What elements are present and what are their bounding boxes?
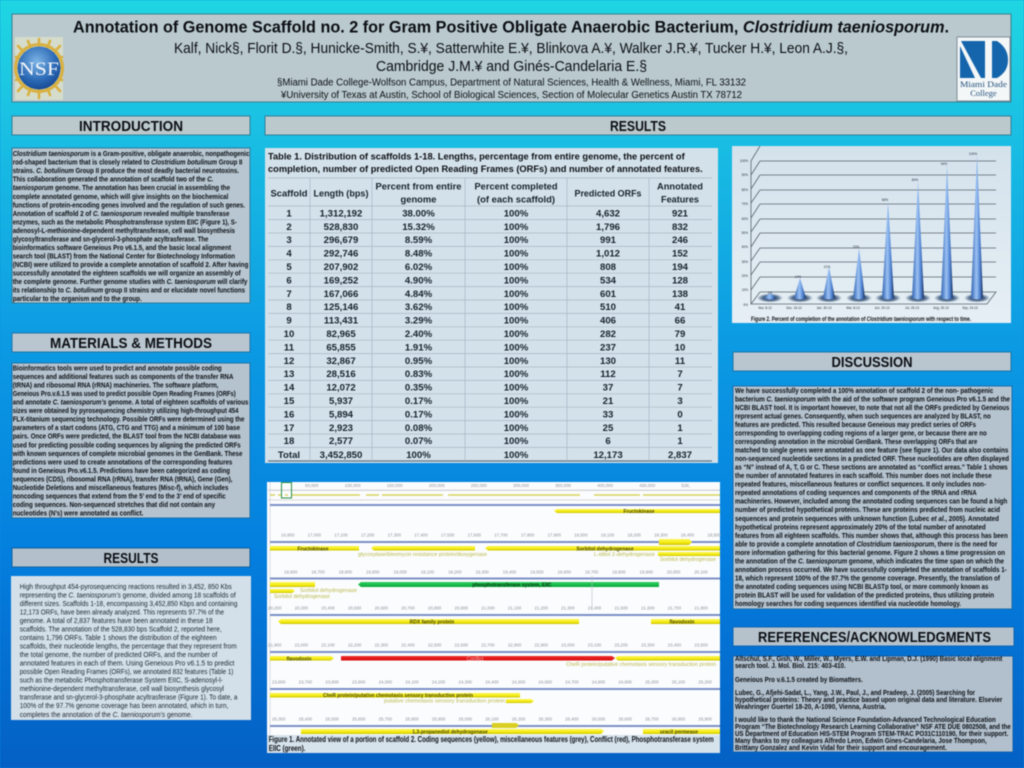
track 2: glycosylase/bleomycin resistance protein/dioxygenase	[358, 552, 487, 558]
track 4	[268, 606, 720, 626]
chart category labels: Mar. 8-13	[846, 306, 860, 310]
track 4: 20,200 20,300 20,400 20,500 20,600 20,700 20,800 20,900 21,000 21,100 21,200 21,300 21,400 21,500 21,600 21,700 21,800	[268, 606, 708, 610]
heading: materials and methods: MATERIALS & METHODS	[50, 336, 212, 352]
panel: materials and methods text: nucleotides (N’s) were annotated as conflict.	[13, 508, 143, 518]
table rows: 38.00%	[402, 208, 435, 219]
chart axis labels	[740, 159, 748, 307]
table rows: 13	[284, 369, 294, 380]
panel: references text: search tool. J. Mol. Biol. 215: 403-410.	[735, 661, 846, 670]
table rows: 601	[600, 289, 617, 300]
cone value labels: 84%	[912, 178, 918, 182]
table rows: 100%	[504, 409, 529, 420]
chart category labels: Jan. 30-13	[816, 306, 832, 310]
chart axis labels: 20%	[742, 274, 748, 278]
table rows: 100%	[406, 450, 431, 461]
cone value labels	[768, 152, 977, 295]
table rows: 2,837	[668, 450, 692, 461]
table rows: 169,252	[324, 275, 358, 286]
table rows: 100%	[504, 383, 529, 394]
table rows: 282	[600, 329, 616, 340]
panel: materials and methods text: Geneious Pro.v.6.1.5 was used to predict possible Open Reading Frames (ORFs)	[13, 389, 236, 398]
table rows: 8.59%	[405, 235, 433, 246]
panel: materials and methods text	[12, 363, 250, 518]
figure 1 caption: EIIC (green).	[269, 744, 305, 753]
table caption: Table 1. Distribution of scaffolds 1-18. Lengths, percentage from entire genome, the percent of	[268, 152, 685, 162]
table rows: 100%	[504, 208, 529, 219]
panel: introduction text: search tool (BLAST) from the National Center for Biotechnology Information	[13, 252, 235, 260]
table rows: 15.32%	[402, 222, 435, 233]
panel: introduction text: bioinformatics software Geneious Pro v6.1.5, and the basic local alignment	[13, 243, 231, 252]
panel: introduction text: adenosyl-L-methionine-dependent methyltransferase, cell wall biosynthesis	[13, 226, 235, 235]
table rows: 33	[603, 409, 613, 420]
panel: results text	[11, 576, 251, 720]
icon: Miami Dade College logo	[957, 37, 1010, 101]
panel: materials and methods text: used for predicting possible coding sequences by aligning the predicted ORFs	[13, 440, 241, 449]
track 2: Fructokinase	[297, 546, 329, 552]
track 7: uracil permease	[660, 730, 698, 736]
table rows: 292,746	[324, 249, 358, 260]
table rows: 4.84%	[405, 289, 433, 300]
heading: materials and methods	[12, 333, 250, 352]
table header	[270, 182, 703, 206]
track 2	[270, 532, 721, 563]
table rows: 100%	[504, 356, 529, 367]
icon: Miami Dade College logo: Miami Dade	[960, 79, 1007, 89]
table rows: 167,066	[324, 289, 358, 300]
table rows: 25	[603, 423, 614, 434]
table rows: 10	[675, 342, 685, 353]
panel: results text: transferase and sn-glycerol-3-phosphate acyltrasferase (Figure 1). To date, a	[20, 693, 238, 702]
chart axis labels: 100%	[740, 159, 748, 163]
heading: results center: RESULTS	[610, 119, 666, 135]
panel: results text: contains 1,796 ORFs. Table 1 shows the distribution of the eighteen	[20, 633, 217, 642]
table rows: 7	[677, 369, 683, 380]
table rows: 65,855	[326, 342, 356, 353]
panel: materials and methods text: and annotate C. taeniosporum’s genome. A total of eighteen scaffolds of various	[13, 398, 248, 407]
table rows: 100%	[504, 316, 529, 327]
table rows: 7	[677, 383, 683, 394]
table rows: 2	[286, 222, 292, 233]
table rows: 8.48%	[405, 249, 433, 260]
panel: results text: 100% of the 97.7% genome coverage has been annotated, which in turn,	[20, 701, 228, 710]
table rows: 14	[284, 383, 295, 394]
heading: introduction	[12, 116, 250, 135]
figure 1 caption: Figure 1. Annotated view of a portion of scaffold 2. Coding sequences (yellow), miscellaneous features (grey), Conflict (red), Phosphotransferase system	[269, 735, 714, 744]
track 7: 25,300 25,400 25,500 25,600 25,700 25,800 25,900 26,000 26,100 26,200 26,300 26,400 26,500 26,600 26,700 26,800 26,900	[272, 716, 712, 722]
table rows: 194	[672, 262, 689, 273]
panel: discussion text: able to provide a complete annotation of Clostridium taeniosporum, there is the need for	[735, 539, 997, 548]
panel: materials and methods text: sequences (CDS), ribosomal RNA (rRNA), transfer RNA (tRNA), Gene (Gen),	[13, 474, 232, 483]
header banner	[12, 14, 1011, 102]
cone bars	[757, 155, 990, 302]
panel: materials and methods text: (tRNA) and ribosomal RNA (rRNA) machineries. The software platform,	[13, 381, 218, 390]
table rows: 32,867	[326, 356, 356, 367]
table rows: 6.02%	[405, 262, 433, 273]
panel: materials and methods text: with known sequences of complete microbial genomes in the GenBank. These	[12, 449, 243, 458]
track 2: Sorbitol dehydrogenase	[576, 546, 634, 552]
panel: materials and methods text: coding sequences. Non-sequenced stretches that did not contain any	[13, 500, 216, 509]
table rows: 18	[284, 436, 295, 447]
panel: results text: completes the annotation of the C. taeniosporum’s genome.	[20, 710, 192, 719]
table rows: 2,923	[329, 423, 353, 434]
table caption	[268, 152, 703, 175]
chart axis labels: 30%	[742, 260, 748, 264]
panel: references text	[733, 654, 1013, 752]
chart axis labels: 0%	[743, 303, 748, 307]
affiliations: ¥University of Texas at Austin, School of Biological Sciences, Section of Molecular Genetics Austin TX 78712	[280, 90, 742, 101]
table rows: 0.08%	[405, 423, 433, 434]
panel: introduction text: functions of protein-encoding genes involved and the regulation of such genes.	[13, 200, 245, 209]
panel: references text: Weahringer Guertel 18-20, A-1090, Vienna, Austria.	[735, 702, 886, 711]
track 2: L-iditol 2-dehydrogenase	[594, 552, 655, 558]
cone value labels: 100%	[969, 152, 977, 156]
table rows: 66	[675, 316, 685, 327]
track 1	[270, 504, 720, 515]
affiliations: §Miami Dade College-Wolfson Campus, Department of Natural Sciences, Health & Wellness, Miami, FL 33132	[277, 78, 746, 88]
panel: materials and methods text: sequences and additional features such as components of the transfer RNA	[13, 372, 234, 381]
table rows: Total	[278, 450, 300, 461]
panel: materials and methods text: pairs. Once ORFs were predicted, the BLAST tool from the NCBI database was	[13, 432, 241, 441]
table rows: 128	[672, 275, 689, 286]
authors: Kalf, Nick§, Florit D.§, Hunicke-Smith, S.¥, Satterwhite E.¥, Blinkova A.¥, Walker J.R.¥, Tucker H.¥, Leon A.J.§,	[174, 41, 848, 57]
chart category labels: Sep. 24-13	[962, 306, 978, 310]
track 7: 1,3-propanediol dehydrogenase	[412, 730, 488, 736]
heading: introduction: INTRODUCTION	[79, 119, 183, 135]
chart axis labels: 10%	[742, 288, 748, 292]
table rows: 6	[286, 275, 292, 286]
title: Annotation of Genome Scaffold no. 2 for Gram Positive Obligate Anaerobic Bacterium, Clostridium taeniosporum.	[73, 18, 949, 36]
table rows	[278, 208, 692, 461]
table rows: 41	[675, 302, 686, 313]
table rows: 138	[672, 289, 689, 300]
table rows: 1	[677, 423, 683, 434]
table rows: 100%	[504, 436, 529, 447]
cone value labels: 14%	[795, 275, 801, 279]
table rows: 528,830	[324, 222, 358, 233]
track 3: Sorbitol dehydrogenase	[274, 594, 330, 600]
track 5: Conflict	[467, 656, 484, 662]
panel: results text: High throughput 454-pyrosequencing reactions resulted in 3,452, 850 Kbs	[20, 582, 232, 591]
panel: introduction text: Clostridium taeniosporum is a Gram-positive, obligate anaerobic, nonpathogenic	[13, 149, 250, 158]
table rows: 0.35%	[405, 383, 433, 394]
table caption: completion, number of predicted Open Reading Frames (ORFs) and number of annotated features.	[268, 164, 703, 175]
panel: introduction text: its relationship to C. botulinum group II strains and or elucidate novel functions	[13, 286, 245, 295]
table rows: 207,902	[324, 262, 358, 273]
track 1: Fructokinase	[623, 509, 655, 515]
panel: materials and methods text: FLX-titanium sequencing technology. Possible ORFs were determined using the	[13, 415, 245, 424]
table rows: 12	[284, 356, 294, 367]
panel: materials and methods text: parameters of a start codons (ATG, CTG and TTG) and a minimum of 100 base	[13, 423, 241, 432]
panel: introduction text: complete annotated genome, which will give insights on the biochemical	[13, 192, 228, 201]
track 4: flavodoxin	[669, 620, 695, 626]
chart axis labels: 40%	[742, 245, 748, 249]
chart category labels: Dec. 16-12	[786, 306, 802, 310]
table rows: 0.83%	[405, 369, 433, 380]
cone value labels: 68%	[882, 198, 888, 202]
table rows: 21	[603, 396, 614, 407]
table rows: 112	[600, 369, 616, 380]
table rows: 15	[284, 396, 295, 407]
panel: figure 1 annotated scaffold view	[267, 482, 721, 753]
table rows: 79	[675, 329, 685, 340]
track 3: phosphotransferase system, EIIC	[472, 583, 552, 589]
table rows: 2,577	[329, 436, 353, 447]
table rows: 28,516	[326, 369, 356, 380]
table rows: 5	[286, 262, 292, 273]
chart category labels	[758, 306, 978, 310]
table rows: 0.17%	[405, 396, 433, 407]
track 6: 23,600 23,700 23,800 23,900 24,000 24,100 24,200 24,300 24,400 24,500 24,600 24,700 24,800 24,900 25,000 25,100 25,200	[272, 680, 712, 684]
chart category labels: Jul. 25-13	[905, 306, 919, 310]
table rows: 16	[284, 409, 294, 420]
table rows: 4.90%	[405, 275, 433, 286]
table rows: 0.95%	[405, 356, 433, 367]
table rows: 6	[605, 436, 611, 447]
panel: results text: the total genome, the number of predicted ORFs, and the number of	[20, 650, 218, 659]
overview track: 50,000 100,000 150,000 200,000 250,000 300,000 350,000 400,000 450,000 528,	[305, 483, 690, 488]
panel: materials and methods text: sizes were obtained by pyrosequencing chemistry utilizing high-throughput 454	[13, 406, 239, 415]
table grid	[268, 178, 712, 461]
panel: results text: 12,173 ORFs, have been already analyzed. This represents 97.7% of the	[20, 607, 224, 616]
chart category labels: Nov. 8-12	[758, 306, 772, 310]
table rows: 1	[677, 436, 683, 447]
track 7	[270, 716, 720, 736]
authors	[174, 41, 848, 75]
panel: figure 2 completion chart	[732, 146, 1011, 323]
table rows: 100%	[504, 396, 529, 407]
panel: materials and methods text: Nucleotide Deletions and miscellaneous features (Misc-f), which includes	[13, 483, 228, 492]
table rows: 3.62%	[405, 302, 433, 313]
panel: introduction text: successfully annotated the eighteen scaffolds we will organize an assembly of	[13, 268, 241, 278]
table rows: 4	[286, 249, 292, 260]
table rows: 296,679	[324, 235, 358, 246]
cone value labels: 94%	[941, 162, 947, 166]
track 3	[270, 570, 720, 609]
table rows: 0	[677, 409, 683, 420]
panel: results text: representing the C. taeniosporum’s genome, divided among 18 scaffolds of	[20, 590, 236, 599]
table rows: 125,146	[324, 302, 358, 313]
table header: Features	[661, 194, 699, 206]
table rows: 237	[600, 342, 616, 353]
table rows: 246	[672, 235, 688, 246]
table rows: 0.17%	[405, 409, 433, 420]
table rows: 921	[672, 208, 689, 219]
panel: references text: Brittany Gonzalez and Kevin Vidal for their support and encouragement.	[735, 743, 947, 752]
table rows: 5,937	[329, 396, 353, 407]
table rows: 8	[286, 302, 292, 313]
panel: introduction text: particular to the organism and to the group.	[13, 294, 142, 303]
table rows: 100%	[504, 289, 529, 300]
track 6: CheR protein/putative chemotaxis sensory transduction protein	[323, 693, 473, 699]
heading: results left	[12, 548, 250, 567]
table rows: 2.40%	[405, 329, 433, 340]
panel: results text: annotated features in each of them. Using Geneious Pro v6.1.5 to predict	[20, 659, 235, 668]
table rows: 12,173	[593, 450, 623, 461]
icon: NSF logo: NSF	[19, 59, 59, 80]
table rows: 100%	[504, 222, 529, 233]
panel: introduction text: enzymes, such as the metabolic Phosphotransferase system EIIC (Figure 1), S-	[13, 217, 237, 226]
track 6: putative chemotaxis sensory transduction protein	[384, 698, 505, 704]
panel: discussion text: homology searches for coding sequences identified via nucleotide homology.	[735, 599, 961, 608]
panel: references text: Geneious Pro v.6.1.5 created by Biomatters.	[735, 675, 863, 684]
table rows: 100%	[504, 275, 529, 286]
panel: results text: scaffolds. The annotation of the 528,830 bps Scaffold 2, reported here,	[20, 624, 222, 634]
panel: materials and methods text: found in Geneious Pro.v6.1.5. Predictions have been categorized as coding	[13, 466, 230, 475]
table rows: 17	[284, 423, 294, 434]
panel: results text: different sizes. Scaffolds 1-18, encompassing 3,452,850 Kbps and containing	[20, 599, 237, 608]
chart axis labels: 80%	[742, 188, 748, 192]
cone value labels: 21%	[824, 265, 830, 269]
table rows: 1	[286, 208, 292, 219]
table rows: 3.29%	[405, 316, 433, 327]
table rows: 11	[284, 342, 295, 353]
table rows: 100%	[504, 369, 529, 380]
chart axis labels: 60%	[742, 217, 748, 221]
table rows: 100%	[504, 235, 529, 246]
heading: references and acknowledgments: REFERENCES/ACKNOWLEDGMENTS	[758, 629, 991, 646]
table rows: 100%	[504, 450, 529, 461]
track 4: RDX family protein	[410, 620, 454, 626]
panel: introduction text	[12, 148, 250, 303]
panel: introduction text: taeniosporum genome. The annotation has been crucial in assembling the	[13, 183, 231, 192]
table rows: 100%	[504, 423, 529, 434]
table rows: 1,796	[596, 222, 620, 233]
table rows: 113,431	[324, 316, 359, 327]
panel: results text: methionine-dependent methyltransferase, cell wall biosynthesis glycosyl	[20, 684, 224, 693]
panel: results text: possible Open Reading Frames (ORFs), we annotated 832 features (Table 1)	[20, 667, 234, 676]
table header: Length (bps)	[314, 188, 368, 200]
heading: discussion	[733, 352, 1011, 371]
chart axis labels: 90%	[742, 173, 748, 177]
panel: introduction text: the complete genome. Further genome studies with C. taeniosporum will clarify	[13, 277, 248, 286]
panel: introduction text: (NCBI) were utilized to provide a complete annotation of scaffold 2. After having	[13, 260, 249, 269]
heading: results left: RESULTS	[104, 551, 159, 567]
table rows: 1,312,192	[320, 208, 362, 219]
track 3: 18,600 18,700 18,800 18,900 19,000 19,100 19,200 19,300 19,400 19,500 19,600 19,700 19,800 19,900 20,000 20,100	[284, 570, 708, 574]
table rows: 1,012	[596, 249, 620, 260]
track 3: Sorbitol dehydrogenase	[300, 588, 357, 594]
panel: introduction text: Annotation of scaffold 2 of C. taeniosporum revealed multiple transferase	[13, 209, 230, 218]
table rows: 5,894	[329, 409, 354, 420]
track 5	[268, 642, 720, 668]
track 6	[270, 680, 720, 704]
table rows: 991	[600, 235, 617, 246]
panel: introduction text: strains. C. botulinum Group II produce the most deadly bacterial neurotoxins.	[13, 166, 239, 175]
table header: Predicted ORFs	[574, 188, 642, 200]
icon: NSF logo	[15, 37, 63, 100]
track 2: 16,900 17,000 17,100 17,200 17,300 17,400 17,500 17,600 17,700 17,800 17,900 18,000 18,100 18,200 18,300 18,400 18,500	[281, 532, 721, 538]
table rows: 9	[286, 316, 292, 327]
table header: genome	[400, 194, 436, 206]
table header: Scaffold	[270, 188, 308, 200]
figure 2 caption: Figure 2. Percent of completion of the annotation of Clostridium taeniosporum with respect to time.	[751, 316, 971, 323]
heading: results center	[265, 116, 1011, 135]
chart grid	[751, 146, 996, 304]
table rows: 152	[672, 249, 688, 260]
table rows: 3	[286, 235, 292, 246]
table rows: 37	[603, 383, 613, 394]
table rows: 11	[675, 356, 686, 367]
table rows: 12,072	[326, 383, 356, 394]
panel: results text: genome. A total of 2,837 features have been annotated in these 18	[20, 616, 213, 625]
panel: introduction text: glycosyltransferase and sn-glycerol-3-phosphate acyltrasferase. The	[13, 234, 209, 243]
table rows: 832	[672, 222, 688, 233]
chart axis labels: 50%	[742, 231, 748, 235]
chart category labels: Jun. 20-13	[874, 306, 890, 310]
table rows: 406	[600, 316, 616, 327]
heading: discussion: DISCUSSION	[832, 355, 912, 371]
panel: table 1	[265, 148, 718, 463]
authors: Cambridge J.M.¥ and Ginés-Candelaria E.§	[376, 59, 647, 75]
panel: materials and methods text: predictions were used to create annotations of the corresponding features	[13, 457, 232, 466]
chart category labels: Aug. 30-13	[933, 306, 949, 310]
table rows: 534	[600, 275, 617, 286]
track 5: CheR protein/putative chemotaxis sensory transduction protein	[566, 662, 716, 668]
table rows: 100%	[504, 329, 529, 340]
table rows: 3,452,850	[320, 450, 362, 461]
table header: Percent from entire	[376, 182, 462, 192]
table rows: 10	[284, 329, 294, 340]
track 5: flavodoxin	[286, 656, 312, 662]
panel: discussion text: sequences and protein sequences with unknown function (Lubec et al., 2005). Annotated	[735, 514, 999, 523]
table rows: 3	[677, 396, 683, 407]
panel: introduction text: rod-shaped bacterium that is closely related to Clostridium botulinum Group II	[13, 158, 242, 167]
track 5: 21,900 22,000 22,100 22,200 22,300 22,400 22,500 22,600 22,700 22,800 22,900 23,000 23,100 23,200 23,300 23,400 23,500	[268, 642, 708, 648]
panel: results text: scaffolds, their nucleotide lengths, the percentage that they represent from	[20, 642, 237, 650]
panel: materials and methods text: noncoding sequences that extend from the 5’ end to the 3’ end of specific	[13, 492, 226, 500]
chart axis labels: 70%	[742, 202, 748, 206]
panel: discussion text	[733, 386, 1012, 609]
table rows: 1.91%	[405, 342, 433, 353]
table rows: 130	[600, 356, 616, 367]
table rows: 82,965	[326, 329, 356, 340]
table header: Percent completed	[474, 182, 558, 192]
cone value labels: 2%	[768, 291, 772, 295]
panel: results text: such as the metabolic Phosphotransferase System EIIC, S-adenosyl-l-	[20, 676, 223, 685]
table header: Annotated	[657, 182, 703, 192]
table rows: 4,632	[596, 208, 620, 219]
icon: Miami Dade College logo: College	[970, 88, 997, 98]
track 2: Sorbitol dehydrogenase	[660, 557, 716, 563]
table rows: 100%	[504, 342, 529, 353]
panel: materials and methods text: Bioinformatics tools were used to predict and annotate possible coding	[13, 364, 222, 372]
table rows: 0.07%	[405, 436, 433, 447]
panel: introduction text: This collaboration generated the annotation of scaffold two of the C.	[13, 175, 213, 184]
table rows: 808	[600, 262, 617, 273]
figure 1 caption	[267, 735, 720, 753]
table rows: 7	[286, 289, 292, 300]
cone value labels: 33%	[853, 245, 859, 249]
table rows: 100%	[504, 302, 529, 313]
table rows: 100%	[504, 249, 529, 260]
table rows: 100%	[504, 262, 529, 273]
table rows: 510	[600, 302, 616, 313]
table header: (of each scaffold)	[477, 194, 555, 206]
overview track	[268, 482, 720, 500]
affiliations	[277, 78, 746, 101]
